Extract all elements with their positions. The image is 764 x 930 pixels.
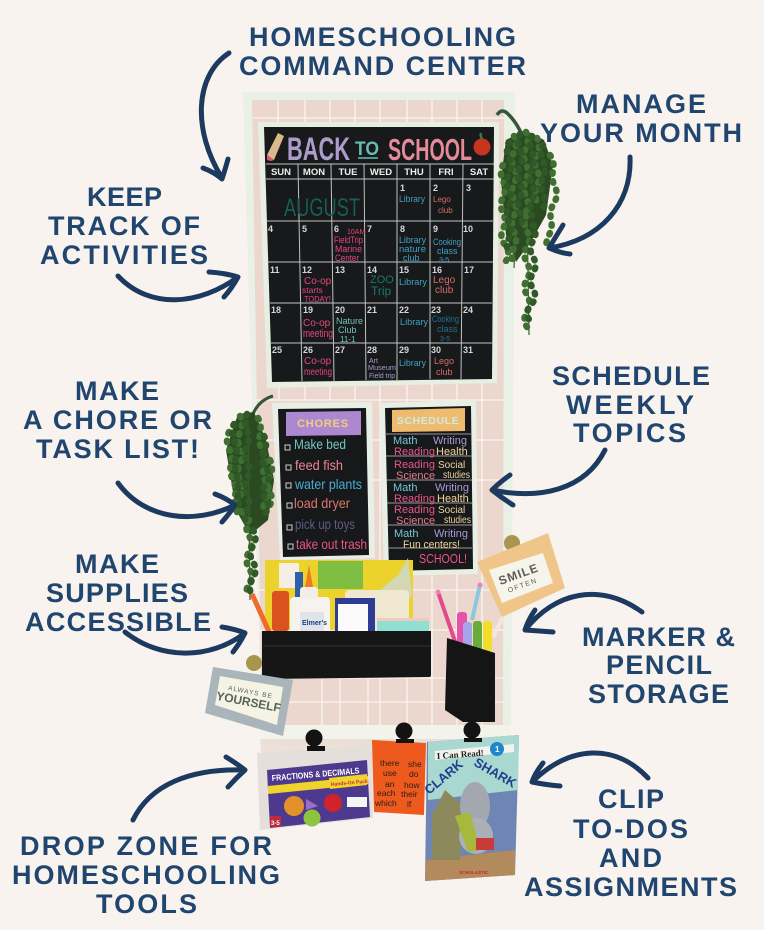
weekday headers: MON: [303, 167, 325, 178]
orange sight words card: do: [409, 769, 419, 779]
label: make supplies accessible: MAKE: [75, 549, 159, 579]
label: keep track of activities: KEEP: [87, 182, 162, 212]
schedule entries: Reading: [394, 446, 435, 458]
orange sight words card: each: [377, 788, 396, 798]
orange sight words card: she: [408, 759, 422, 769]
calendar title: SCHOOL: [388, 132, 472, 167]
calendar entries: 11-1: [340, 335, 356, 344]
calendar entries: [284, 194, 461, 380]
calendar entries: class: [437, 324, 458, 334]
label: clip to-dos and assignments: TO-DOS: [573, 814, 688, 844]
schedule entries: Writing: [433, 435, 467, 447]
smile often card: [477, 533, 565, 617]
calendar entries: starts: [302, 285, 323, 295]
schedule entries: SCHOOL!: [419, 551, 467, 566]
calendar entries: nature: [399, 244, 426, 254]
schedule entries: Science: [396, 515, 435, 527]
clark the shark book: SHARK: [472, 755, 520, 791]
schedule entries: Social: [438, 505, 465, 516]
schedule entries: Math: [393, 435, 417, 447]
label: drop zone for homeschooling tools: DROP ZONE FOR: [20, 831, 272, 861]
chores list: load dryer: [294, 495, 350, 511]
calendar entries: TODAY!: [304, 295, 331, 304]
arrow: to command center: [201, 53, 229, 179]
label: make supplies accessible: [25, 549, 211, 637]
label: clip to-dos and assignments: CLIP: [598, 784, 664, 814]
label: make supplies accessible: ACCESSIBLE: [25, 607, 211, 637]
calendar entries: FieldTrip: [334, 235, 363, 245]
label: make a chore or task list: MAKE: [75, 376, 159, 406]
date numbers: 22: [399, 305, 409, 315]
schedule entries: Reading: [394, 504, 435, 516]
calendar entries: club: [438, 206, 453, 215]
calendar entries: AUGUST: [284, 194, 360, 222]
heading: homeschooling command center: COMMAND CENTER: [239, 51, 526, 81]
supplies: [252, 558, 431, 679]
date numbers: [268, 183, 474, 355]
weekday headers: [271, 167, 488, 178]
sticky notes and cards: [335, 590, 429, 636]
black wall basket: [262, 631, 431, 679]
schedule entries: Health: [436, 446, 468, 458]
arrow: to supplies: [125, 627, 245, 653]
arrow: to marker storage: [525, 594, 642, 632]
label: schedule weekly topics: SCHEDULE: [552, 361, 710, 391]
always be yourself card: ALWAYS BE: [227, 685, 273, 700]
schedule entries: Science: [396, 470, 435, 482]
date numbers: 10: [463, 224, 473, 234]
fractions and decimals pack: 3-5: [271, 821, 280, 827]
calendar entries: Cooking: [433, 237, 461, 247]
date numbers: 23: [431, 305, 441, 315]
date numbers: 18: [271, 305, 281, 315]
workbook stack: [265, 558, 413, 630]
date numbers: 20: [335, 305, 345, 315]
date numbers: 3: [466, 183, 471, 193]
date numbers: 13: [335, 265, 345, 275]
calendar entries: 3-5: [440, 336, 450, 343]
calendar entries: Lego: [434, 356, 454, 366]
schedule rows: [386, 434, 472, 548]
label: manage your month: YOUR MONTH: [540, 118, 742, 148]
calendar entries: Library: [399, 194, 425, 204]
schedule entries: Writing: [434, 528, 468, 540]
clark the shark book: 1: [495, 745, 500, 754]
orange sight words card: an: [385, 779, 395, 789]
weekday headers: THU: [404, 167, 424, 178]
arrow: to weekly schedule: [492, 450, 605, 505]
date numbers: 27: [335, 345, 345, 355]
arrow: to clipped assignments: [532, 753, 648, 786]
date numbers: 28: [367, 345, 377, 355]
weekday headers: SAT: [470, 167, 488, 178]
label: schedule weekly topics: TOPICS: [573, 418, 686, 448]
date numbers: 24: [463, 305, 473, 315]
date numbers: 19: [303, 305, 313, 315]
orange sight words card: which: [374, 798, 397, 808]
date numbers: 15: [399, 265, 409, 275]
label: manage your month: MANAGE: [576, 89, 706, 119]
calendar entries: Co-op: [304, 276, 332, 287]
schedule entries: Math: [394, 528, 418, 540]
calendar: [258, 122, 499, 388]
schedule entries: Health: [437, 493, 469, 505]
clark the shark book: I Can Read!: [436, 748, 484, 761]
calendar entries: Co-op: [303, 318, 331, 329]
label: make a chore or task list: A CHORE OR: [23, 405, 212, 435]
label: drop zone for homeschooling tools: HOMESCHOOLING: [12, 860, 280, 890]
orange sight words card: there: [380, 758, 400, 768]
calendar entries: ZOO: [370, 274, 394, 286]
fractions and decimals pack: [257, 745, 373, 830]
calendar entries: Museum: [368, 365, 396, 372]
date numbers: 31: [463, 345, 473, 355]
calendar entries: 10AM: [347, 229, 365, 236]
calendar grid: [266, 164, 494, 381]
arrow: to chore list: [118, 483, 235, 522]
date numbers: 16: [432, 265, 442, 275]
schedule entries: studies: [443, 470, 470, 481]
calendar title: TO: [355, 139, 379, 160]
calendar entries: Field trip: [369, 373, 395, 380]
label: clip to-dos and assignments: ASSIGNMENTS: [524, 872, 737, 902]
clark the shark book: CLARK: [421, 756, 466, 797]
smile often card: OFTEN: [507, 577, 539, 595]
schedule entries: Social: [438, 460, 465, 471]
calendar entries: Lego: [433, 195, 451, 204]
date numbers: 21: [367, 305, 377, 315]
heading: homeschooling command center: HOMESCHOOLING: [249, 22, 516, 52]
schedule entries: Writing: [435, 482, 469, 494]
orange sight words card: if: [407, 799, 412, 809]
calendar entries: meeting: [303, 328, 333, 340]
label: keep track of activities: ACTIVITIES: [40, 240, 208, 270]
date numbers: 6: [334, 224, 339, 234]
orange sight words card: how: [404, 780, 420, 790]
chores list: take out trash: [296, 536, 367, 552]
always be yourself card: [205, 655, 293, 736]
calendar entries: club: [403, 253, 420, 263]
date numbers: 1: [400, 183, 405, 193]
label: schedule weekly topics: [552, 361, 710, 448]
chores title: [286, 411, 361, 436]
calendar entries: Library: [400, 317, 429, 327]
label: marker and pencil storage: MARKER &: [582, 622, 735, 652]
label: keep track of activities: TRACK OF: [48, 211, 200, 241]
label: manage your month: [540, 89, 742, 148]
schedule board: [379, 400, 478, 576]
calendar entries: Marine: [335, 244, 362, 254]
label: clip to-dos and assignments: [524, 784, 737, 902]
calendar entries: class: [437, 246, 458, 256]
glue bottle: Elmer's: [302, 620, 327, 627]
orange sight words card: their: [401, 789, 418, 799]
chores title: CHORES: [297, 418, 349, 430]
arrow: to month calendar: [549, 157, 630, 254]
clark the shark book: SCHOLASTIC: [459, 870, 489, 875]
binder clips: [306, 722, 482, 751]
chores list: [285, 436, 367, 552]
arrow: to drop zone: [133, 757, 245, 820]
chores list: water plants: [294, 476, 362, 492]
calendar entries: Club: [338, 325, 357, 335]
fractions and decimals pack: FRACTIONS & DECIMALS: [271, 765, 360, 783]
calendar entries: Lego: [433, 275, 456, 286]
schedule entries: Reading: [394, 493, 435, 505]
schedule entries: [393, 435, 471, 566]
plant: hanging left of chores: [226, 396, 274, 600]
date numbers: 26: [303, 345, 313, 355]
chores list: feed fish: [295, 457, 343, 473]
orange sight words card: [372, 740, 426, 815]
date numbers: 5: [302, 224, 307, 234]
calendar entries: Trip: [371, 284, 392, 298]
calendar entries: Nature: [336, 316, 363, 326]
calendar entries: meeting: [304, 367, 332, 378]
date numbers: 2: [433, 183, 438, 193]
date numbers: 14: [367, 265, 377, 275]
schedule title: [392, 408, 465, 432]
plant: hanging over calendar: [497, 111, 557, 335]
chores list: pick up toys: [295, 516, 355, 532]
calendar title: BACK: [287, 131, 350, 167]
date numbers: 25: [272, 345, 282, 355]
label: make a chore or task list: TASK LIST!: [36, 434, 199, 464]
arrow: to activities: [118, 272, 238, 300]
date numbers: 30: [431, 345, 441, 355]
always be yourself card: YOURSELF: [215, 689, 282, 715]
calendar entries: Cooking: [432, 314, 459, 324]
weekday headers: TUE: [338, 167, 358, 178]
fractions and decimals pack: Hands-On Pack: [331, 779, 368, 788]
wire board frame: [243, 92, 515, 762]
calendar entries: Library: [399, 235, 426, 245]
schedule entries: studies: [444, 515, 471, 526]
label: marker and pencil storage: STORAGE: [588, 679, 729, 709]
label: drop zone for homeschooling tools: [12, 831, 280, 919]
calendar entries: Library: [399, 277, 428, 287]
calendar entries: 3-5: [439, 257, 449, 264]
smile often card: SMILE: [497, 561, 541, 588]
calendar entries: club: [435, 285, 454, 296]
calendar entries: club: [436, 367, 453, 377]
orange sight words card: use: [383, 768, 397, 778]
date numbers: 17: [464, 265, 474, 275]
label: marker and pencil storage: [582, 622, 735, 709]
heading: homeschooling command center: [239, 22, 526, 81]
rainbow pencil: [252, 594, 270, 634]
label: make supplies accessible: SUPPLIES: [46, 578, 188, 608]
calendar title: [267, 131, 490, 167]
chores board: [272, 402, 375, 560]
date numbers: 29: [399, 345, 409, 355]
date numbers: 8: [400, 224, 405, 234]
calendar entries: Center: [335, 253, 359, 263]
chores list: Make bed: [294, 436, 346, 452]
date numbers: 12: [302, 265, 312, 275]
schedule entries: Math: [393, 482, 417, 494]
schedule entries: Reading: [394, 459, 435, 471]
clark the shark book: [421, 735, 520, 881]
date numbers: 11: [270, 265, 280, 275]
label: schedule weekly topics: WEEKLY: [566, 390, 694, 420]
label: keep track of activities: [40, 182, 208, 270]
label: make a chore or task list: [23, 376, 212, 464]
date numbers: 4: [268, 224, 273, 234]
label: marker and pencil storage: PENCIL: [606, 650, 712, 680]
label: clip to-dos and assignments: AND: [599, 843, 662, 873]
weekday headers: FRI: [438, 167, 454, 178]
pencil cup: [436, 582, 512, 722]
date numbers: 9: [433, 224, 438, 234]
schedule entries: Fun centers!: [403, 539, 460, 551]
schedule title: SCHEDULE: [397, 415, 459, 427]
calendar entries: Library: [399, 358, 426, 368]
glue bottle: [272, 565, 330, 637]
calendar entries: Co-op: [304, 356, 332, 367]
weekday headers: WED: [370, 167, 392, 178]
weekday headers: SUN: [271, 167, 291, 178]
label: drop zone for homeschooling tools: TOOLS: [96, 889, 197, 919]
date numbers: 7: [367, 224, 372, 234]
calendar entries: Art: [369, 358, 378, 365]
